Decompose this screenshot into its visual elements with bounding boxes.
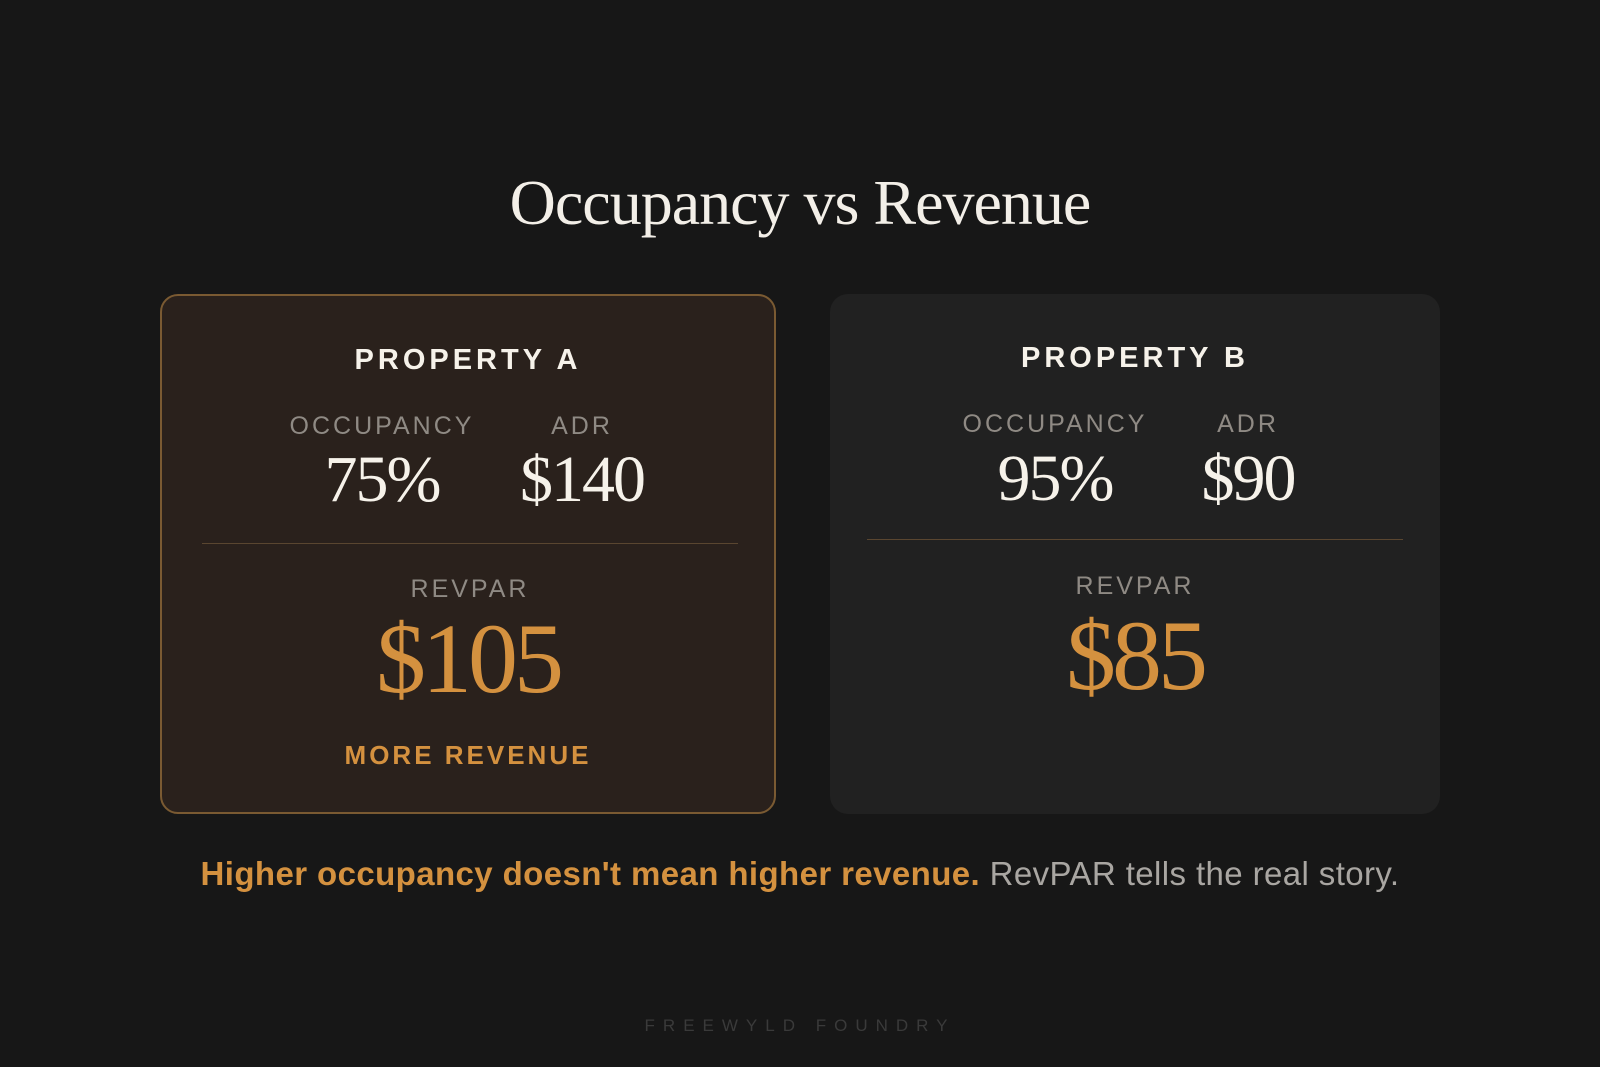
adr label A: ADR bbox=[551, 412, 613, 440]
occupancy label A: OCCUPANCY bbox=[290, 412, 474, 440]
occupancy value B: 95% bbox=[998, 442, 1112, 515]
heading: property A: PROPERTY A bbox=[355, 344, 581, 376]
occupancy label B: OCCUPANCY bbox=[963, 410, 1147, 438]
revpar value B: $85 bbox=[1066, 600, 1204, 711]
revpar label B: REVPAR bbox=[1076, 572, 1194, 600]
adr label B: ADR bbox=[1217, 410, 1279, 438]
occupancy value A: 75% bbox=[324, 443, 439, 516]
bottom takeaway text: Higher occupancy doesn't mean higher revenue. RevPAR tells the real story. bbox=[201, 855, 1399, 892]
adr value A: $140 bbox=[520, 443, 644, 516]
footer brand: FREEWYLD FOUNDRY bbox=[645, 1016, 955, 1035]
heading: property B: PROPERTY B bbox=[1021, 342, 1249, 374]
title: Occupancy vs Revenue bbox=[510, 167, 1090, 238]
revpar label A: REVPAR bbox=[411, 575, 529, 603]
callout: more revenue: MORE REVENUE bbox=[345, 740, 591, 770]
panel: property B bbox=[830, 294, 1440, 814]
revpar value A: $105 bbox=[376, 603, 560, 714]
panel: property A bbox=[160, 294, 776, 814]
adr value B: $90 bbox=[1202, 442, 1294, 515]
